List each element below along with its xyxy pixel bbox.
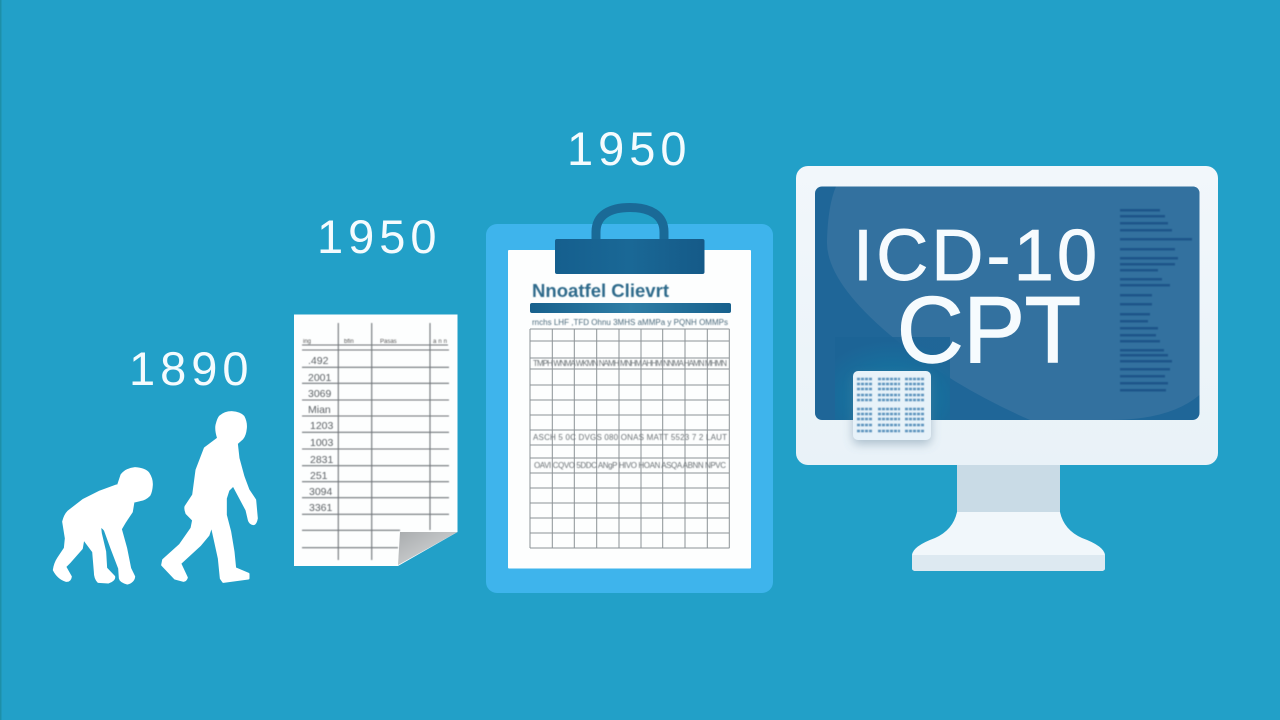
- screen teal glow: [835, 337, 950, 420]
- screen code lines: [1120, 209, 1192, 392]
- chart table text rows: ASCH 5 0C DVGS 080 ONAS MATT 5523 7 2 LAUT: [533, 433, 727, 442]
- left edge line: [0, 0, 2, 720]
- monitor bezel: [796, 166, 1218, 465]
- year label: 1950 clipboard: 1950: [567, 122, 692, 175]
- ledger row entries: Mian: [308, 404, 331, 416]
- ledger column headers: [303, 339, 447, 345]
- year label: 1950 ledger: 1950: [317, 210, 442, 263]
- monitor stand neck: [957, 464, 1060, 514]
- ledger row entries: [308, 355, 334, 514]
- ledger row entries: 251: [310, 470, 328, 482]
- ledger sheet: [294, 314, 458, 566]
- ledger rules: [302, 323, 449, 560]
- clipboard handle: [596, 208, 664, 240]
- monitor stand base lip: [912, 555, 1105, 571]
- panel: hospital chart clipboard: [486, 208, 773, 593]
- panel: computer monitor: [796, 166, 1218, 571]
- chart table text rows: TMPH WNMA WKMN NAMH MNHM AHHM NNMA HAMN MHMN: [533, 359, 727, 368]
- chart title: Nnoatfel Clievrt: [532, 281, 669, 301]
- icon: stooped ape figure: [54, 468, 152, 583]
- small code card: [853, 371, 931, 440]
- screen heading: ICD-10: ICD-10: [853, 216, 1097, 296]
- ledger row entries: 1003: [310, 437, 334, 449]
- icon: upright human figure: [162, 412, 257, 582]
- page curl: [398, 532, 458, 565]
- chart table text rows: OAVI CQVO 5DDC ANgP HIVO HOAN ASQA ABNN NPVC: [534, 461, 726, 470]
- chart table text rows: [532, 318, 728, 470]
- ledger column headers: ing: [303, 339, 311, 345]
- ledger row entries: 3361: [309, 502, 333, 514]
- ledger row entries: 3094: [309, 486, 333, 498]
- ledger row entries: .492: [308, 355, 329, 367]
- screen highlight: [827, 186, 1200, 420]
- ledger column headers: bfin: [344, 339, 354, 345]
- code card data blocks: [857, 379, 925, 431]
- code card background: [853, 371, 931, 440]
- chart table grid: [530, 329, 730, 548]
- monitor stand base: [912, 512, 1105, 571]
- ledger column headers: ann: [433, 339, 447, 345]
- year label: 1890: 1890: [129, 342, 254, 395]
- monitor screen: [815, 186, 1200, 420]
- ledger row entries: 2831: [310, 454, 334, 466]
- ledger row entries: 2001: [308, 372, 332, 384]
- clipboard board: [486, 224, 773, 593]
- clipboard paper: [508, 250, 751, 568]
- ledger row entries: 1203: [310, 420, 334, 432]
- clipboard clip: [555, 239, 704, 274]
- screen heading: CPT: CPT: [897, 277, 1081, 382]
- chart title bar: [530, 303, 731, 313]
- panel: paper ledger: [294, 314, 458, 566]
- icon: human evolution silhouettes: [54, 412, 257, 583]
- ledger row entries: 3069: [308, 388, 332, 400]
- ledger column headers: Pasas: [380, 339, 397, 345]
- chart table text rows: rnchs LHF ,TFD Ohnu 3MHS aMMPa y PQNH OMMPs: [532, 318, 728, 327]
